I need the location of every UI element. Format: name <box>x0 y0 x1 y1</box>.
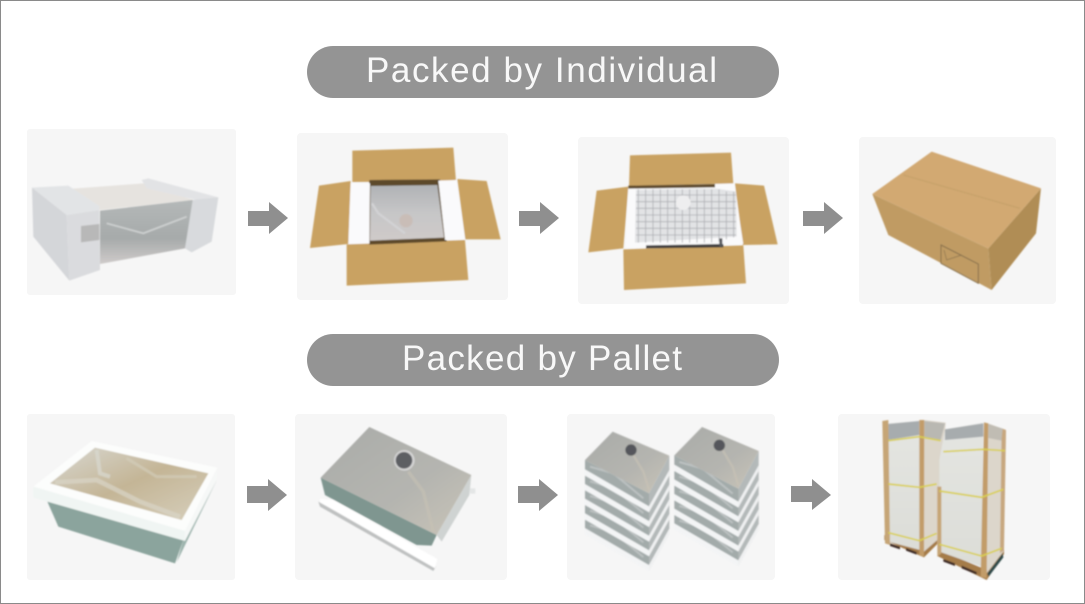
left pallet <box>882 420 946 557</box>
arrow 3 <box>803 202 843 234</box>
panel: open carton with foam and bagged sink <box>297 133 508 300</box>
panel: foam frame with plastic liner <box>27 414 235 580</box>
panel: two shrink-wrapped pallets <box>838 414 1050 580</box>
arrow 5 <box>518 479 558 511</box>
panel: open carton with sink grid <box>578 137 789 304</box>
panel: sealed carton <box>859 137 1056 304</box>
arrow 2 <box>519 202 559 234</box>
panel: foam corners around bagged sink <box>27 129 236 295</box>
heading: Packed by Pallet: Packed by Pallet <box>402 339 682 378</box>
left stack layers <box>585 432 669 571</box>
heading: Packed by Individual: Packed by Individual <box>366 51 717 90</box>
arrow 1 <box>248 202 288 234</box>
right stack layers <box>674 427 759 566</box>
heading: Packed by Individual <box>307 46 779 98</box>
heading: Packed by Pallet <box>307 334 779 386</box>
arrow 4 <box>247 479 287 511</box>
panel: two stacks of sinks <box>567 414 775 580</box>
arrow 6 <box>791 479 831 510</box>
right pallet <box>937 422 1006 580</box>
panel: wrapped sink on foam base <box>295 414 507 580</box>
